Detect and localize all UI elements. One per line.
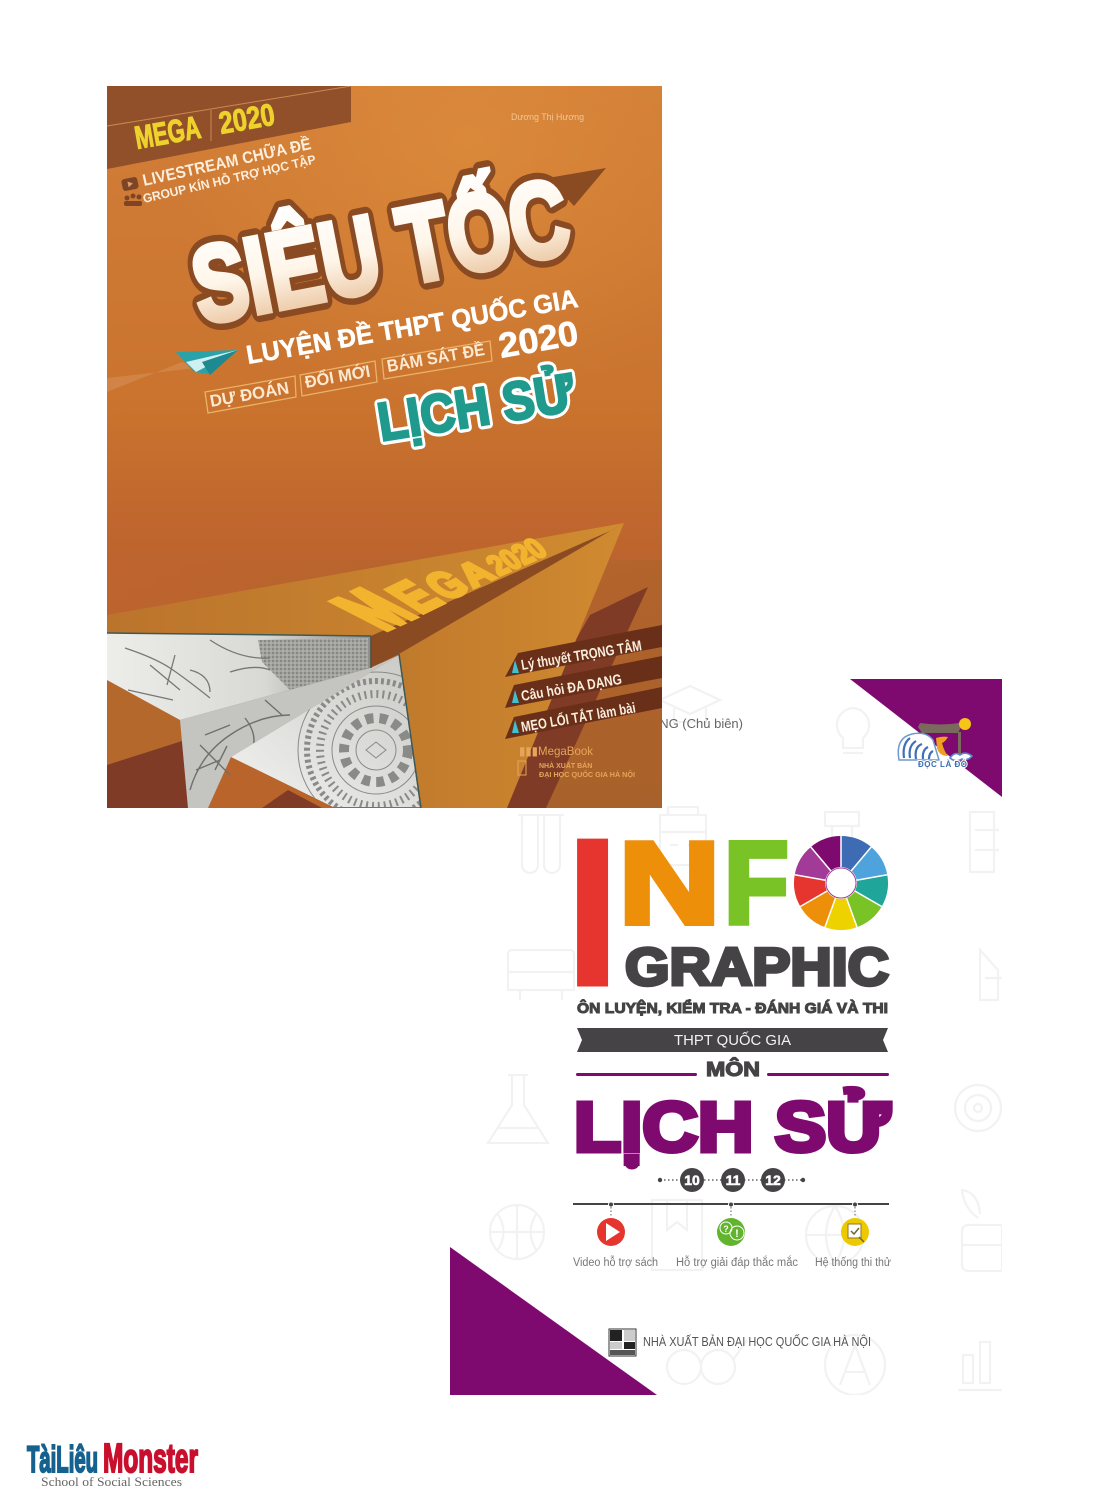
logo: Đọc là đó (898, 718, 972, 769)
bronze drum page (231, 655, 420, 807)
MegaBook logo: ▮▮▮MegaBook (519, 744, 594, 758)
publisher lines (518, 760, 635, 779)
icon: question support: ? (723, 1224, 729, 1234)
year 2020: 2020 (496, 314, 581, 366)
band: Lý thuyết trọng tâm (505, 625, 662, 677)
plane title MEGA 2020: M (313, 579, 435, 640)
main title SIÊU TỐC: SIÊU TỐC (182, 155, 578, 347)
subtitle LUYỆN ĐỀ THPT QUỐC GIA: LUYỆN ĐỀ THPT QUỐC GIA (244, 283, 580, 370)
tag labels: DỰ ĐOÁN (208, 378, 290, 411)
logo: Tài Liệu Monster: Monster (103, 1435, 198, 1481)
tag labels (208, 340, 486, 411)
left grey page with sketch (107, 633, 370, 720)
grade badges 10 11 12: 10 (684, 1172, 700, 1188)
letter O as colour wheel (797, 839, 885, 927)
centre fold (371, 531, 610, 668)
icon: question support (717, 1218, 745, 1246)
feature labels (573, 1256, 891, 1269)
icon: question support: ! (735, 1228, 739, 1240)
letter N: N (619, 818, 720, 948)
grade badges 10 11 12: 11 (726, 1172, 741, 1188)
ribbon: THPT Quốc Gia (577, 1028, 888, 1052)
tag labels: ĐỔI MỚI (303, 362, 372, 392)
subject title LỊCH SỬ: LỊCH SỬ (574, 1087, 891, 1166)
letter I: I (563, 792, 622, 1032)
grade badges 10 11 12 (658, 1168, 805, 1192)
right wing (399, 523, 624, 808)
title word GRAPHIC: GRAPHIC (625, 938, 889, 997)
panel: front book cover Siêu Tốc (107, 86, 662, 828)
band: Câu hỏi đa dạng (505, 656, 662, 708)
title word INFO (563, 792, 887, 1032)
heading MÔN with rules (576, 1057, 889, 1081)
publisher lines: NHÀ XUẤT BẢN (539, 760, 592, 770)
tag labels: BÁM SÁT ĐỀ (385, 340, 486, 376)
banner MEGA 2020: MEGA (132, 109, 203, 156)
main title SIÊU TỐC: SIÊU TỐC (182, 155, 578, 347)
logo: Tài Liệu Monster: TàiLiêu (27, 1439, 98, 1480)
feature labels: Hệ thống thi thử (815, 1257, 891, 1269)
tag boxes (205, 341, 492, 413)
subject title LỊCH SỬ teal: LỊCH SỬ (373, 363, 579, 453)
ribbon: THPT Quốc Gia: THPT QUỐC GIA (674, 1031, 791, 1049)
logo: Tài Liệu Monster (27, 1435, 198, 1489)
feature labels: Video hỗ trợ sách (573, 1256, 658, 1269)
small triangle (211, 776, 332, 808)
publisher logo and name: NHÀ XUẤT BẢN ĐẠI HỌC QUỐC GIA HÀ NỘI (643, 1334, 871, 1349)
band: Lý thuyết trọng tâm: Lý thuyết TRỌNG TÂM (520, 636, 643, 674)
subtitle: ÔN LUYỆN, KIỂM TRA - ĐÁNH GIÁ VÀ THI (577, 999, 888, 1017)
icon: teal paper plane with trail (107, 350, 238, 392)
plane title MEGA 2020: G (413, 562, 480, 607)
plane title MEGA 2020: A (448, 553, 503, 594)
plane title MEGA 2020: 2020 (480, 533, 554, 582)
purple triangle top right (850, 679, 1002, 797)
purple triangle bottom left (450, 1247, 657, 1395)
author name: Dương Thị Hương (511, 112, 584, 122)
feature lines: livestream and group (121, 133, 317, 206)
plane title MEGA 2020: E (374, 573, 457, 622)
icon: group (124, 194, 142, 206)
icon: video play (597, 1218, 625, 1246)
band: Mẹo lối tắt làm bài: MẸO LỐI TẮT làm bài (520, 698, 637, 736)
panel: back book cover Infographic Lịch Sử (450, 679, 1005, 1395)
logo: Đọc là đó: ĐỌC LÀ ĐÓ (918, 760, 967, 769)
band: Câu hỏi đa dạng: Câu hỏi ĐA DẠNG (520, 672, 623, 705)
feature lines: livestream and group: GROUP KÍN HỖ TRỢ HỌC TẬP (141, 151, 317, 206)
feature lines: livestream and group: LIVESTREAM CHỮA ĐỀ (141, 133, 313, 190)
middle grey page (180, 655, 399, 808)
banner MEGA 2020: 2020 (216, 97, 277, 141)
main title SIÊU TỐC (188, 160, 606, 330)
publisher logo and name (609, 1329, 871, 1356)
plane title MEGA 2020 (327, 538, 546, 632)
small triangle shadow (262, 790, 322, 808)
timeline with feature nodes (573, 1202, 889, 1217)
feature bands (505, 625, 662, 739)
dark band behind plane (507, 587, 648, 808)
letter F: F (724, 818, 788, 948)
subject title LỊCH SỬ teal: LỊCH SỬ (373, 363, 579, 453)
lower left shadow band (107, 741, 188, 808)
author text: DƯƠNG THỊ HƯƠNG (Chủ biên) (548, 716, 743, 731)
pale background icons (488, 686, 1005, 1395)
publisher lines: ĐẠI HỌC QUỐC GIA HÀ NỘI (539, 769, 635, 779)
band: Mẹo lối tắt làm bài (505, 687, 662, 739)
upper wing (107, 523, 624, 636)
icon: youtube (122, 177, 138, 191)
plane edge shadow (107, 633, 421, 808)
lower left wing (107, 680, 188, 808)
heading MÔN with rules: MÔN (706, 1057, 760, 1081)
paper plane artwork (107, 523, 662, 828)
icon: exam check (841, 1218, 869, 1246)
feature labels: Hỗ trợ giải đáp thắc mắc (676, 1256, 798, 1269)
grade badges 10 11 12: 12 (765, 1172, 781, 1188)
cover background (107, 86, 662, 808)
banner MEGA 2020 (107, 86, 351, 169)
logo: Tài Liệu Monster: School of Social Sciences (41, 1475, 182, 1489)
